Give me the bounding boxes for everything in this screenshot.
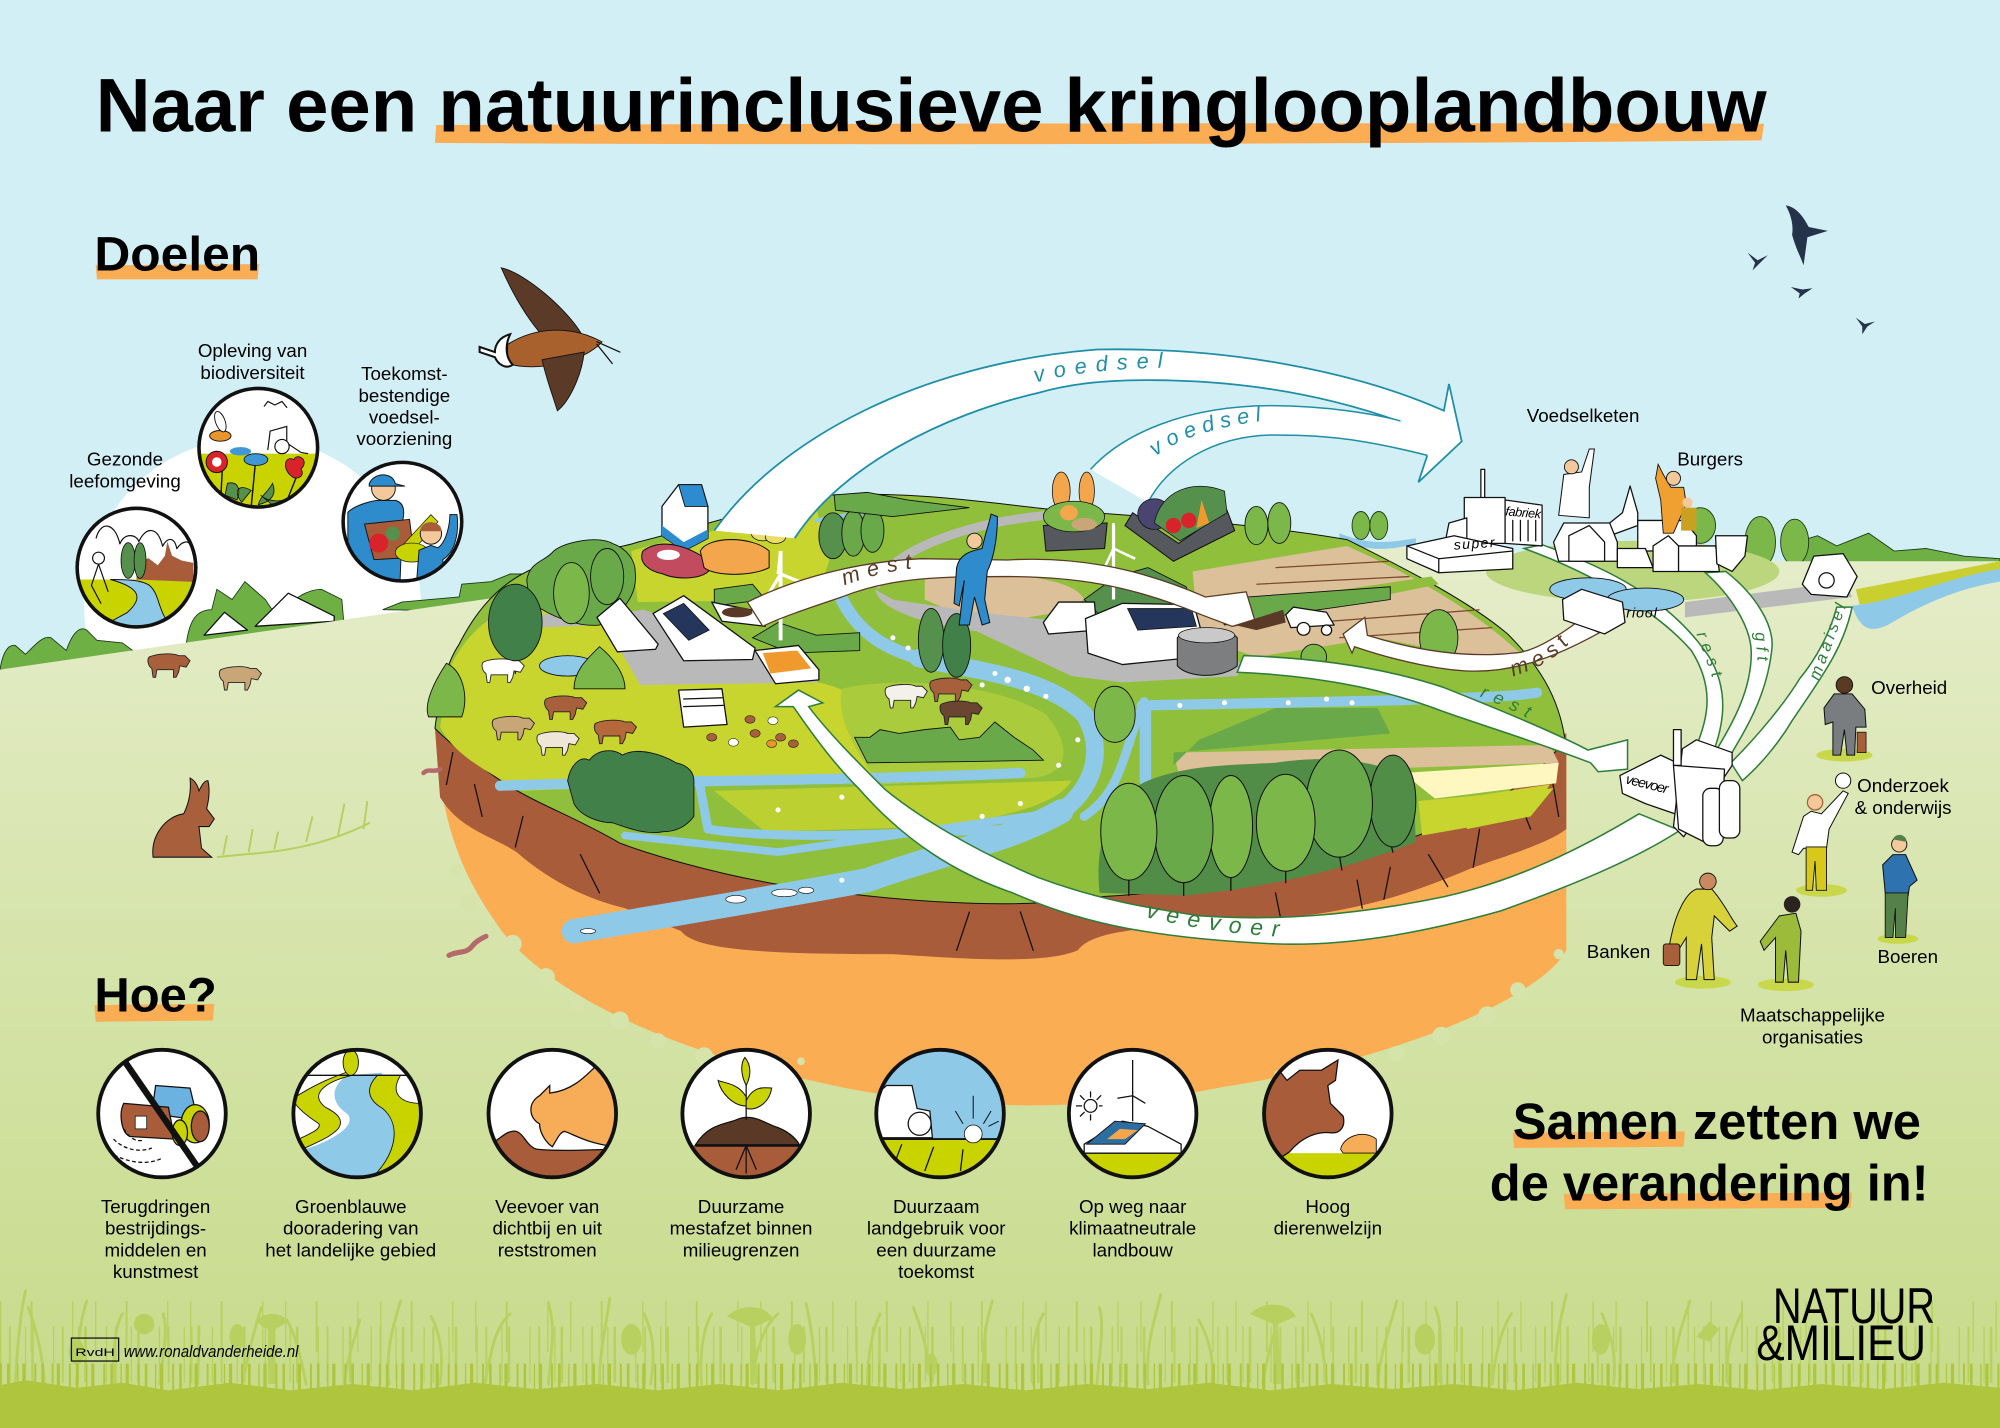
arrow label: gft: gft	[1751, 631, 1773, 667]
heading underline: Doelen	[96, 264, 259, 279]
arrow label: mest: mest	[1512, 634, 1568, 676]
person: man in white coat	[1559, 449, 1594, 518]
illustrator credit: RvdH	[75, 1347, 115, 1359]
sun behind the goals	[84, 438, 421, 774]
how label: Groenblauwe dooradering: het landelijke gebied	[265, 1239, 436, 1260]
food crate: harvest left	[1043, 472, 1107, 551]
how label: Duurzame mestafzet: mestafzet binnen	[670, 1218, 812, 1239]
arrow: rest from fabriek	[1524, 545, 1723, 765]
goal label: Toekomstbestendige voedselvoorziening: voorziening	[356, 428, 452, 449]
arrow label: voedsel: voedsel	[1150, 406, 1260, 455]
field in the river bend	[841, 683, 1064, 784]
grass band at the bottom	[0, 1378, 2000, 1428]
fish in the river	[580, 887, 814, 934]
goal label: Gezonde leefomgeving: leefomgeving	[69, 470, 181, 491]
right wind turbine	[1105, 523, 1135, 600]
heading: Hoe?: Hoe?	[94, 969, 217, 1023]
arrow label: mest: mest	[843, 554, 912, 586]
ground	[0, 536, 2000, 1428]
how label: Op weg naar klimaatneutrale landbouw: klimaatneutrale	[1069, 1218, 1196, 1239]
horizon right: bushes and trees	[1352, 508, 2000, 587]
food crate: vegetables right	[1125, 486, 1235, 561]
figure: farmer in blue overall	[954, 514, 997, 625]
winding river and ditches	[500, 504, 1537, 931]
title: Naar een natuurinclusieve kringlooplandbouw	[96, 63, 1767, 148]
how label: Veevoer van dichtbij: dichtbij en uit	[492, 1218, 603, 1239]
horizon bushes left	[0, 574, 536, 676]
icon: feed from nearby and residual flows	[489, 1050, 616, 1177]
veevoer factory	[1620, 730, 1740, 846]
tractor on field	[1235, 607, 1334, 635]
icon: towards climate-neutral agriculture	[1069, 1050, 1196, 1177]
how label: Terugdringen bestrijdingsmiddelen en kunstmest: middelen en	[105, 1239, 207, 1260]
label: Burgers: Burgers	[1677, 449, 1743, 470]
how label: Op weg naar klimaatneutrale landbouw: Op weg naar	[1079, 1196, 1186, 1217]
label: Onderzoek en onderwijs: Onderzoek	[1857, 775, 1949, 796]
chickens	[707, 716, 798, 747]
animal: hare	[153, 778, 370, 857]
grass silhouettes at the bottom	[0, 1291, 2000, 1384]
logo: Natuur & Milieu	[1756, 1278, 1935, 1371]
icon: healthy living environment	[77, 508, 196, 627]
how label: Duurzaam landgebruik: landgebruik voor	[867, 1218, 1006, 1239]
person: Boeren	[1878, 835, 1918, 944]
left wind turbine	[765, 551, 806, 640]
food: milk carton, meat, cheese, potatoes	[642, 485, 786, 578]
left farm buildings	[597, 596, 819, 727]
how label: Duurzaam landgebruik: toekomst	[898, 1261, 975, 1282]
title underline	[435, 123, 1764, 144]
white foam on the river	[776, 635, 1355, 883]
how label: Duurzame mestafzet: Duurzame	[698, 1196, 784, 1217]
goal label: Opleving van biodiversiteit: biodiversiteit	[200, 362, 305, 383]
landscape disc: green surface	[435, 494, 1565, 904]
how label: Groenblauwe dooradering: Groenblauwe	[295, 1196, 407, 1217]
goal label: Gezonde leefomgeving: Gezonde	[87, 449, 163, 470]
how label: Op weg naar klimaatneutrale landbouw: landbouw	[1093, 1239, 1173, 1260]
label: riool: riool	[1626, 604, 1658, 620]
goal label: Toekomstbestendige voedselvoorziening: Toekomst-	[361, 363, 448, 384]
how label: Terugdringen bestrijdingsmiddelen en kunstmest: Terugdringen	[101, 1196, 210, 1217]
lime meadows	[440, 508, 1550, 832]
person: citizen with child	[1656, 464, 1696, 533]
illustrator credit	[71, 1338, 300, 1361]
horizon farm buildings left	[204, 593, 334, 635]
logo: Natuur & Milieu: NATUUR	[1773, 1278, 1935, 1334]
how label: Veevoer van dichtbij: reststromen	[498, 1239, 597, 1260]
label: fabriek on building: fabriek	[1505, 503, 1542, 521]
how label: Terugdringen bestrijdingsmiddelen en kunstmest: kunstmest	[113, 1261, 199, 1282]
arrow: voedsel (small)	[1091, 406, 1427, 503]
arrow: gft	[1705, 571, 1772, 763]
right landscape: road, river and reeds	[1339, 533, 2000, 629]
arrow label: maaisel: maaisel	[1805, 597, 1851, 683]
arrow: mest to field	[747, 559, 1255, 626]
icon: green-blue veining	[293, 1050, 421, 1177]
how label: Hoog dierenwelzijn: Hoog	[1305, 1196, 1350, 1217]
slogan underlines	[1513, 1131, 1852, 1209]
arrow label: veevoer: veevoer	[1148, 906, 1280, 936]
label: Overheid: Overheid	[1871, 677, 1947, 698]
arrow: rest to veevoer	[1237, 656, 1628, 772]
label: Maatschappelijke organisaties: Maatschappelijke	[1740, 1005, 1885, 1026]
slogan: Samen zetten we	[1513, 1093, 1921, 1150]
icon: future-proof food supply	[343, 462, 462, 581]
label: Onderzoek en onderwijs: & onderwijs	[1855, 797, 1952, 818]
heading: Doelen: Doelen	[94, 227, 260, 281]
mowing machine	[1802, 554, 1857, 597]
arrow: veevoer	[776, 690, 1680, 944]
slogan: de verandering in!	[1490, 1154, 1929, 1211]
icon: biodiversity revival	[199, 388, 318, 507]
arrow: voedsel (large)	[714, 349, 1462, 538]
brown topsoil layer with roots	[435, 728, 1566, 959]
grazing cows	[148, 654, 982, 755]
label: Voedselketen: Voedselketen	[1527, 405, 1639, 426]
tan arable fields	[925, 546, 1559, 835]
arrow: maaisel	[1731, 607, 1852, 781]
arrow: mest from riool	[1343, 617, 1599, 671]
label: veevoer on factory: veevoer	[1624, 771, 1672, 797]
bird: black-tailed godwit	[480, 268, 620, 411]
birds: swallows	[1747, 205, 1875, 334]
arrow label: voedsel: voedsel	[1034, 352, 1163, 382]
how label: Duurzaam landgebruik: een duurzame	[876, 1239, 996, 1260]
goal label: Toekomstbestendige voedselvoorziening: voedsel-	[369, 406, 440, 427]
person: Maatschappelijke organisaties	[1758, 896, 1814, 991]
slogan	[1490, 1093, 1929, 1211]
person: Overheid	[1816, 677, 1872, 762]
arrow label: rest: rest	[1693, 629, 1729, 685]
orange subsoil with pale bubbles	[436, 733, 1566, 1105]
icon: high animal welfare	[1264, 1050, 1392, 1177]
icon: reduce pesticides and fertiliser	[98, 1050, 226, 1177]
how label: Groenblauwe dooradering: dooradering van	[283, 1218, 419, 1239]
worm in the ground	[449, 936, 486, 955]
how label: Veevoer van dichtbij: Veevoer van	[495, 1196, 599, 1217]
logo: Natuur & Milieu: &MILIEU	[1756, 1315, 1926, 1371]
icon: sustainable land use	[876, 1050, 1004, 1177]
label: Banken: Banken	[1587, 941, 1650, 962]
town: factory, supermarket, church, houses	[1407, 469, 1747, 573]
how label: Duurzame mestafzet: milieugrenzen	[683, 1239, 799, 1260]
icon: sustainable manure fat	[682, 1050, 810, 1177]
hedges and dark bush	[568, 584, 1390, 833]
how label: Hoog dierenwelzijn: dierenwelzijn	[1274, 1218, 1382, 1239]
tree cluster left	[427, 492, 1458, 742]
how label: Terugdringen bestrijdingsmiddelen en kunstmest: bestrijdings-	[105, 1218, 206, 1239]
person: Banken	[1663, 873, 1737, 989]
forest in the foreground	[1099, 750, 1416, 895]
arrow label: rest: rest	[1480, 688, 1532, 718]
right farm: house, barn with solar panels, silo	[1043, 602, 1237, 675]
person: Onderzoek en onderwijs	[1792, 773, 1851, 897]
heading underline: Hoe?	[94, 1004, 214, 1022]
water treatment plant	[1550, 578, 1684, 634]
goal label: Toekomstbestendige voedselvoorziening: bestendige	[358, 385, 450, 406]
worm near left edge	[423, 769, 440, 773]
how label: Duurzaam landgebruik: Duurzaam	[893, 1196, 979, 1217]
label: super on building: super	[1453, 534, 1496, 553]
label: Boeren: Boeren	[1878, 946, 1938, 967]
illustrator credit: www.ronaldvanderheide.nl	[124, 1342, 300, 1361]
roads and farmyards	[536, 515, 1244, 685]
goal label: Opleving van biodiversiteit: Opleving van	[198, 340, 307, 361]
label: Maatschappelijke organisaties: organisaties	[1762, 1026, 1863, 1047]
